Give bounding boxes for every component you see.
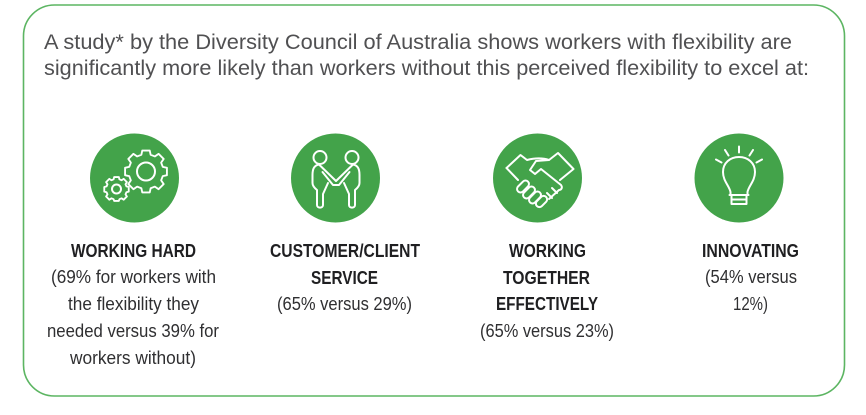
icon: handshake (493, 134, 582, 222)
text block: innovating: INNOVATING (702, 241, 799, 261)
text block: working together effectively: TOGETHER (503, 268, 590, 288)
text block: customer/client service (270, 241, 420, 314)
heading: A study* by the Diversity Council of Australia shows workers with flexibility are (44, 30, 792, 54)
text block: working together effectively: WORKING (509, 241, 586, 261)
text block: working hard: workers without) (69, 348, 196, 368)
text block: working hard: the flexibility they (68, 294, 199, 314)
text block: working together effectively: EFFECTIVELY (496, 294, 598, 314)
icon: light bulb (694, 134, 784, 222)
text block: innovating: 12%) (733, 294, 768, 314)
text block: working together effectively (480, 241, 614, 341)
heading: significantly more likely than workers without this perceived flexibility to excel at: (44, 56, 809, 80)
text block: innovating: (54% versus (705, 267, 797, 287)
text block: working hard: WORKING HARD (71, 241, 196, 261)
text block: working together effectively: (65% versus 23%) (480, 321, 614, 341)
icon: gears (90, 134, 179, 222)
text block: customer/client service: SERVICE (311, 268, 378, 288)
icon: two people holding hands (291, 134, 380, 222)
text block: working hard: (69% for workers with (51, 267, 216, 287)
text block: working hard: needed versus 39% for (47, 321, 219, 341)
text block: customer/client service: CUSTOMER/CLIENT (270, 241, 420, 261)
text block: customer/client service: (65% versus 29%) (277, 294, 412, 314)
heading (44, 30, 809, 80)
text block: working hard (47, 241, 219, 368)
text block: innovating (702, 241, 799, 314)
